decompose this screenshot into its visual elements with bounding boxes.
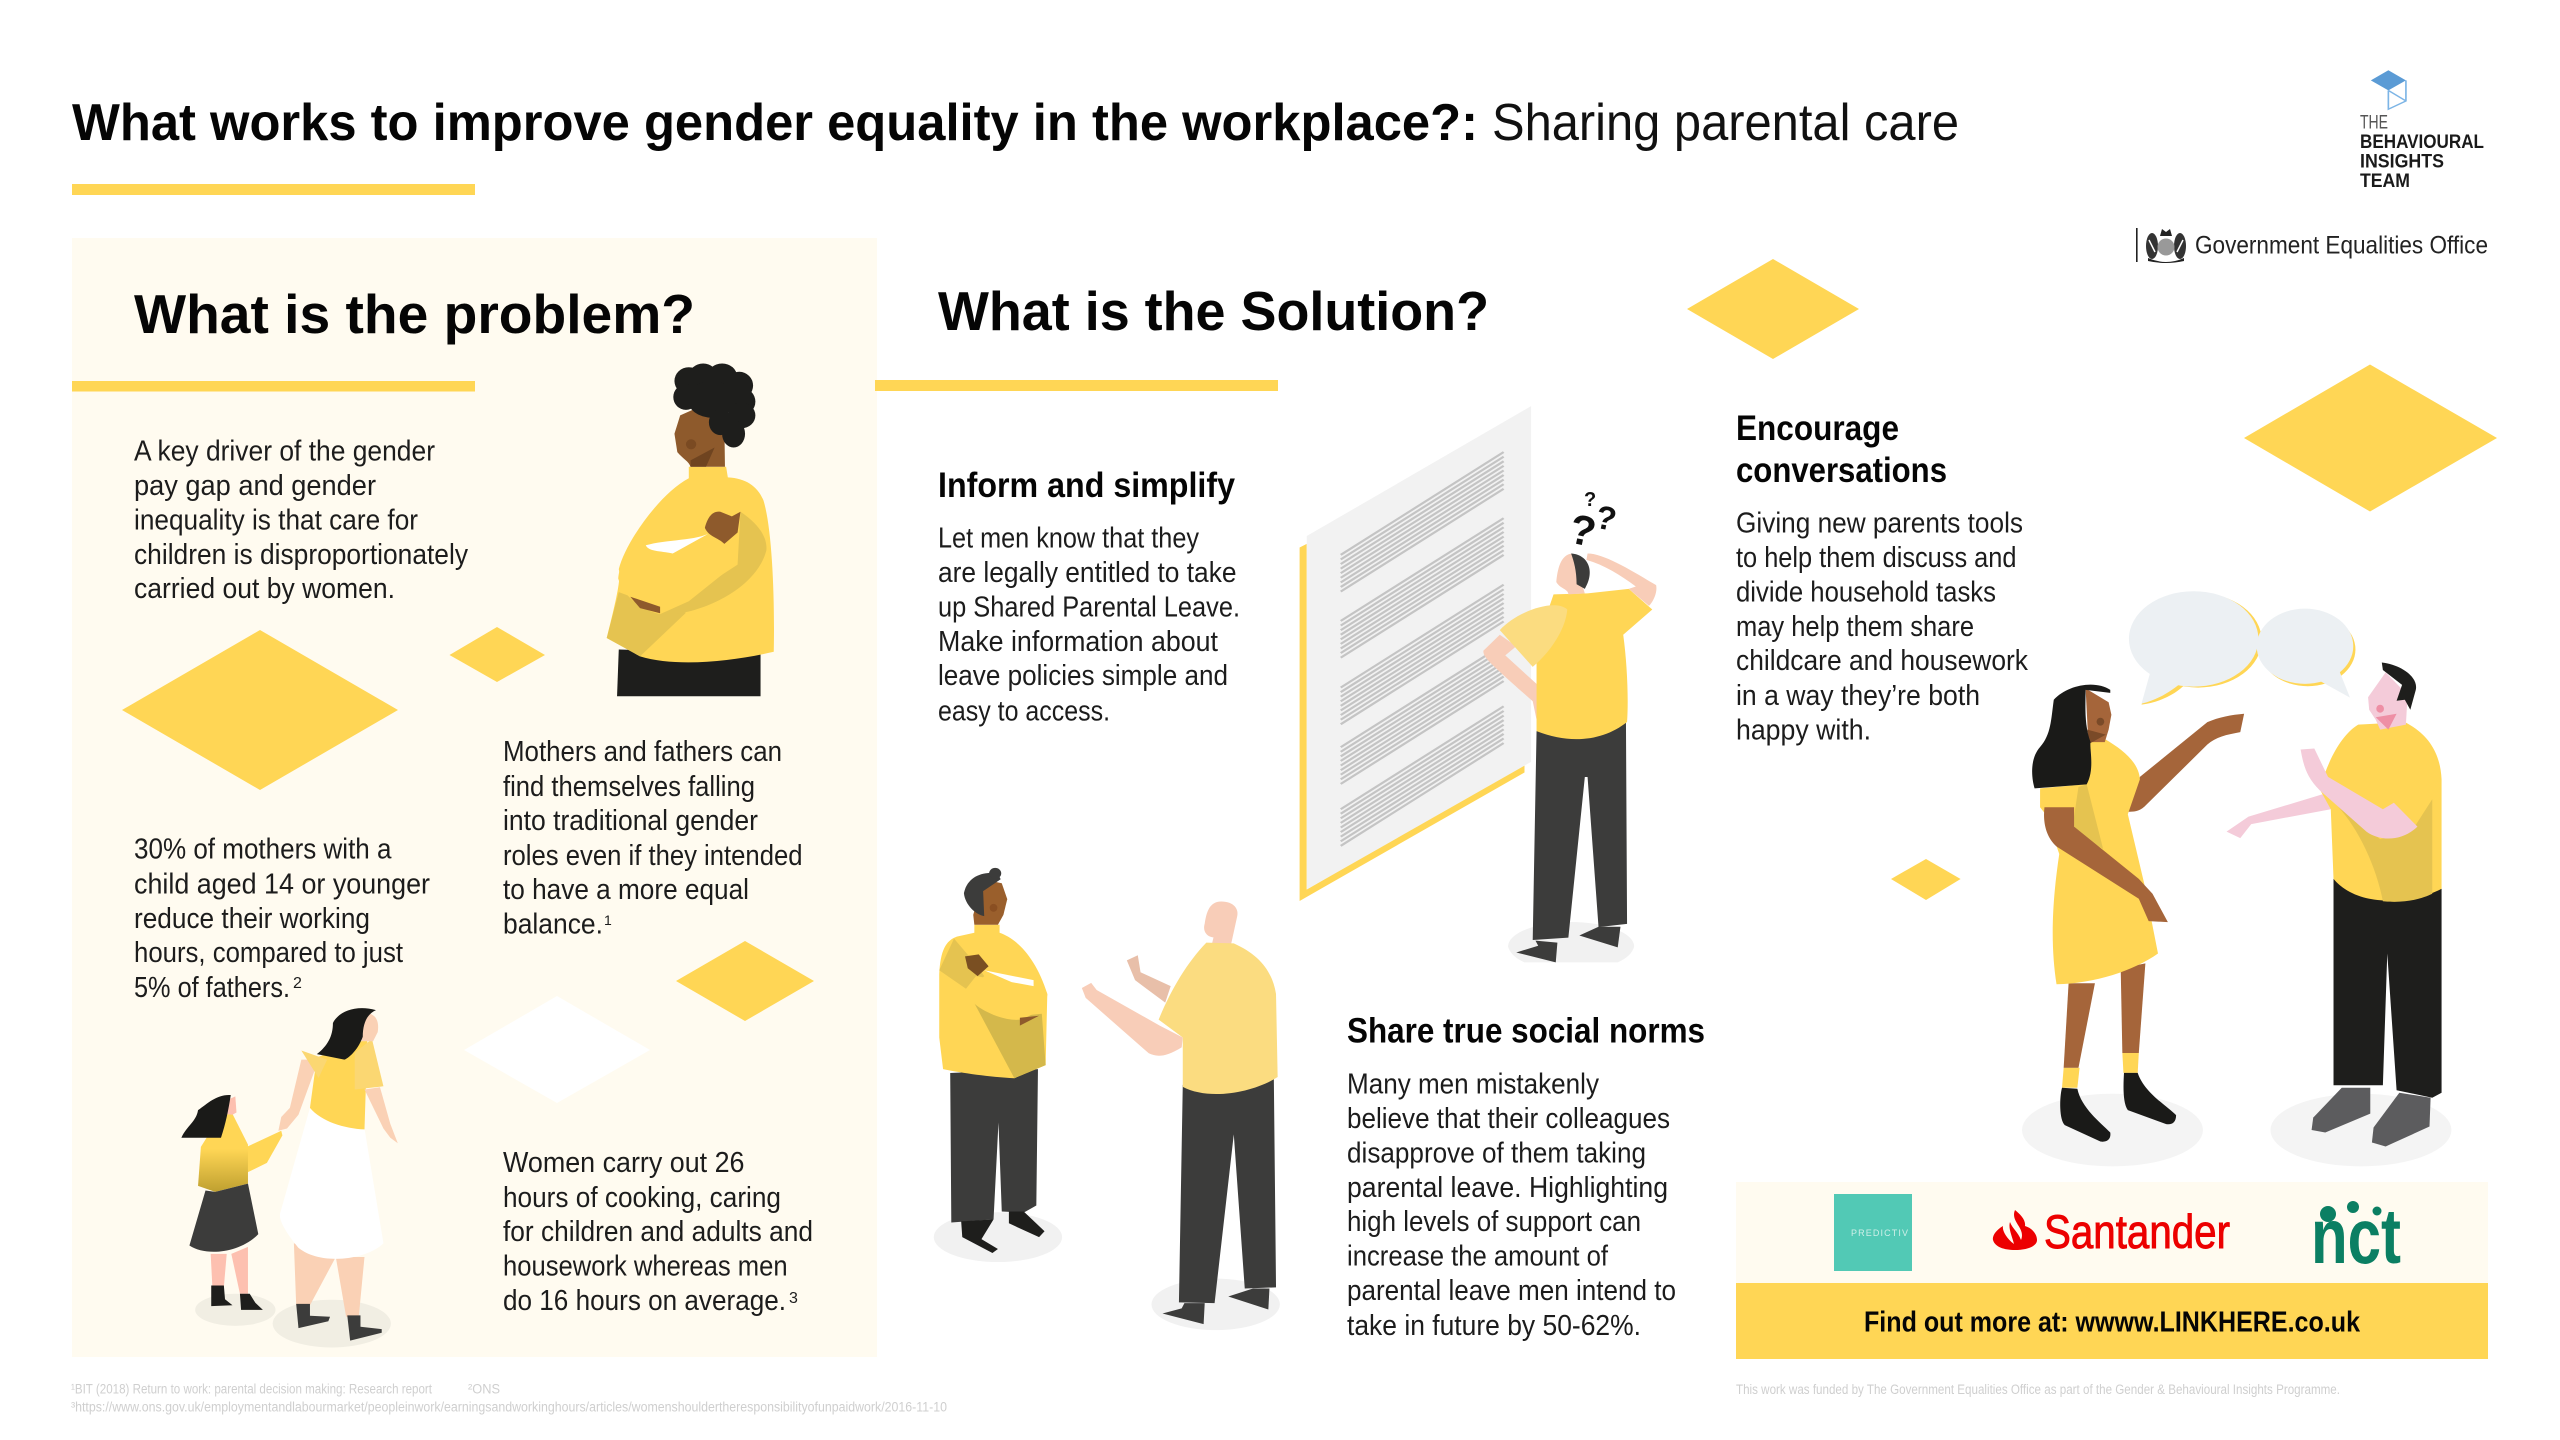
title underline	[72, 184, 475, 195]
section: share true social norms: take in future by 50-62%.	[1347, 1310, 1641, 1342]
logo: Santander	[1993, 1205, 2230, 1258]
logo: The Behavioural Insights Team: BEHAVIOURAL	[2360, 131, 2484, 153]
call to action	[1736, 1283, 2488, 1359]
section: encourage conversations: Giving new parents tools	[1736, 508, 2023, 540]
section: inform and simplify: Inform and simplify	[938, 466, 1235, 505]
text: traditional roles: find themselves falling	[503, 771, 755, 803]
solution heading underline	[875, 380, 1278, 391]
section: encourage conversations: Encourage	[1736, 409, 1899, 448]
diamond: white	[464, 996, 650, 1103]
logo: nct: nct	[2311, 1192, 2401, 1280]
problem heading underline	[72, 381, 475, 392]
logo: Santander: Santander	[2044, 1205, 2230, 1258]
section: encourage conversations: may help them share	[1736, 611, 1974, 643]
text: care hours: hours of cooking, caring	[503, 1182, 781, 1214]
text: care hours	[503, 1147, 813, 1317]
text: traditional roles	[503, 736, 802, 940]
text: care hours: Women carry out 26	[503, 1147, 744, 1179]
text: working hours: 2	[293, 975, 302, 992]
heading: what is the problem: What is the problem?	[134, 283, 695, 345]
section: encourage conversations: divide household tasks	[1736, 576, 1996, 608]
text: care hours: for children and adults and	[503, 1216, 813, 1248]
section: share true social norms	[1347, 1012, 1705, 1342]
diamond: top right	[2244, 364, 2497, 512]
icon: question marks	[1565, 489, 1620, 556]
illustration: policy document	[1300, 406, 1531, 901]
text: working hours: child aged 14 or younger	[134, 868, 430, 900]
text: key driver: inequality is that care for	[134, 504, 418, 536]
diamond: large yellow	[122, 630, 398, 790]
section: inform and simplify: are legally entitled to take	[938, 557, 1236, 589]
logo: The Behavioural Insights Team: INSIGHTS	[2360, 151, 2444, 173]
illustration: woman holding baby	[607, 364, 774, 696]
section: inform and simplify: leave policies simple and	[938, 660, 1228, 692]
text: working hours: hours, compared to just	[134, 937, 403, 969]
section: share true social norms: believe that their colleagues	[1347, 1103, 1670, 1135]
text: key driver: children is disproportionately	[134, 539, 468, 571]
diamond: medium yellow	[676, 941, 814, 1021]
icon: question marks: ?	[1592, 498, 1620, 538]
text: working hours: 5% of fathers.	[134, 972, 290, 1004]
section: share true social norms: disapprove of them taking	[1347, 1137, 1646, 1169]
icon: question marks: ?	[1584, 489, 1596, 511]
title: What works to improve gender equality in the workplace?:	[72, 94, 1478, 152]
panel: partner logos	[1736, 1182, 2488, 1283]
diamond: small right	[1891, 859, 1961, 900]
heading: what is the solution: What is the Solution?	[938, 280, 1489, 342]
diamond: top centre	[1687, 259, 1859, 359]
text: traditional roles: roles even if they intended	[503, 840, 802, 872]
footnotes	[71, 1382, 947, 1414]
section: encourage conversations: happy with.	[1736, 715, 1871, 747]
text: traditional roles: into traditional gender	[503, 805, 758, 837]
section: share true social norms: Many men mistakenly	[1347, 1069, 1599, 1101]
illustration: man reading document	[1483, 553, 1656, 962]
section: share true social norms: parental leave. Highlighting	[1347, 1172, 1668, 1204]
logo: Government Equalities Office: Government Equalities Office	[2195, 232, 2488, 260]
panel: the problem	[72, 238, 877, 1357]
section: encourage conversations	[1736, 409, 2028, 747]
footnotes: ¹BIT (2018) Return to work: parental decision making: Research report	[71, 1382, 432, 1396]
section: encourage conversations: childcare and housework	[1736, 645, 2028, 677]
call to action: Find out more at: wwww.LINKHERE.co.uk	[1864, 1306, 2361, 1338]
section: share true social norms: parental leave men intend to	[1347, 1275, 1676, 1307]
section: share true social norms: Share true social norms	[1347, 1012, 1705, 1051]
logo: Government Equalities Office	[2136, 228, 2488, 263]
logo: Predictiv: PREDICTIV	[1851, 1228, 1908, 1238]
icon: question marks: ?	[1565, 505, 1600, 556]
footnotes: ²ONS	[468, 1382, 500, 1396]
text: care hours: do 16 hours on average.	[503, 1285, 786, 1317]
text: key driver: A key driver of the gender	[134, 436, 435, 468]
text: traditional roles: to have a more equal	[503, 874, 749, 906]
text: traditional roles: 1	[604, 912, 612, 928]
logo: The Behavioural Insights Team: THE	[2360, 112, 2388, 134]
logo: The Behavioural Insights Team	[2360, 70, 2484, 192]
section: inform and simplify: Let men know that they	[938, 523, 1199, 555]
logo: The Behavioural Insights Team: TEAM	[2360, 170, 2410, 192]
funding note: This work was funded by The Government Equalities Office as part of the Gender & Behavioural Insights Programme.	[1736, 1382, 2340, 1397]
section: encourage conversations: to help them discuss and	[1736, 542, 2016, 574]
text: key driver	[134, 436, 468, 605]
section: share true social norms: increase the amount of	[1347, 1241, 1609, 1273]
text: key driver: pay gap and gender	[134, 470, 376, 502]
footnotes: ³https://www.ons.gov.uk/employmentandlabourmarket/peopleinwork/earningsandworkinghours/articles/womenshouldertheresponsibilityofunpaidwork/2016-11-10	[71, 1400, 947, 1414]
text: working hours	[134, 834, 430, 1004]
title: Sharing parental care	[1492, 94, 1959, 152]
section: inform and simplify: up Shared Parental Leave.	[938, 592, 1240, 624]
logo: Predictiv	[1834, 1194, 1912, 1271]
section: inform and simplify	[938, 466, 1240, 728]
illustration: man with arms crossed holding baby	[934, 868, 1062, 1262]
text: care hours: 3	[789, 1290, 798, 1307]
text: traditional roles: Mothers and fathers can	[503, 736, 782, 768]
text: traditional roles: balance.	[503, 908, 603, 940]
illustration: speech bubbles	[2129, 591, 2355, 705]
text: care hours: housework whereas men	[503, 1250, 788, 1282]
section: inform and simplify: Make information about	[938, 626, 1218, 658]
illustration: mother and daughter	[181, 1008, 398, 1347]
section: share true social norms: high levels of support can	[1347, 1206, 1641, 1238]
section: encourage conversations: in a way they’re both	[1736, 680, 1980, 712]
diamond: small yellow	[450, 627, 545, 682]
illustration: man in yellow shirt talking	[2227, 662, 2451, 1166]
text: working hours: 30% of mothers with a	[134, 834, 392, 866]
illustration: woman in yellow dress talking	[2022, 685, 2244, 1166]
section: inform and simplify: easy to access.	[938, 696, 1110, 728]
text: working hours: reduce their working	[134, 903, 370, 935]
illustration: bald man gesturing	[1082, 901, 1280, 1330]
text: key driver: carried out by women.	[134, 573, 395, 605]
section: encourage conversations: conversations	[1736, 451, 1947, 490]
